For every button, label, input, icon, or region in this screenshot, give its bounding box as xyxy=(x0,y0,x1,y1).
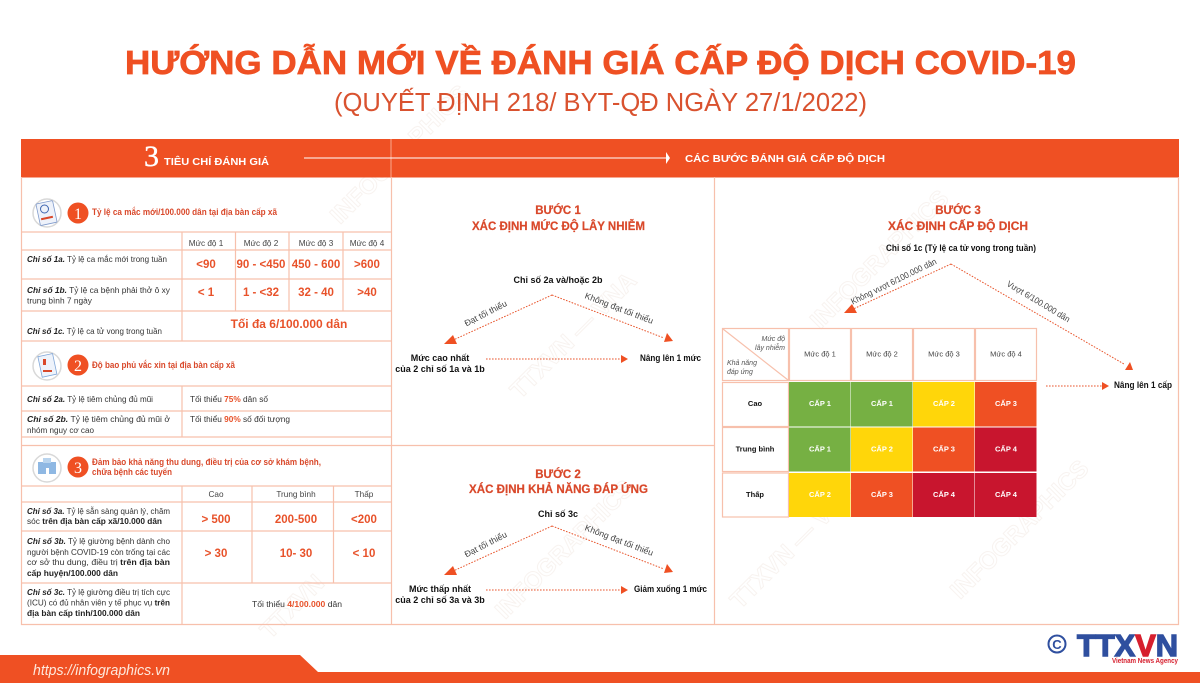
matrix header: Mức độ 4 xyxy=(990,350,1022,358)
heading 2: Độ bao phủ vắc xin tại địa bàn cấp xã xyxy=(92,359,236,370)
table headers xyxy=(189,239,385,248)
heading 3: chữa bệnh các tuyến xyxy=(92,467,172,477)
step 2 heading: BƯỚC 2 xyxy=(535,468,581,481)
step 3 heading: XÁC ĐỊNH CẤP ĐỘ DỊCH xyxy=(888,220,1028,233)
row 3a: 200-500 xyxy=(275,514,317,526)
panel: step 2 xyxy=(395,468,707,605)
table headers: Mức độ 4 xyxy=(350,239,385,248)
step 1 source: Chỉ số 2a và/hoặc 2b xyxy=(513,275,603,285)
panel: step 1 xyxy=(395,204,701,374)
step 2 left result: Mức thấp nhất xyxy=(409,584,471,594)
text: TTXVN — VNA xyxy=(505,267,642,404)
table headers xyxy=(208,490,374,499)
step 2 branches: Đạt tối thiểu xyxy=(463,529,509,559)
row 3a xyxy=(27,506,377,526)
table headers: Cao xyxy=(208,490,224,499)
title: HƯỚNG DẪN MỚI VỀ ĐÁNH GIÁ CẤP ĐỘ DỊCH COVID-19 xyxy=(125,43,1076,82)
row 3c: Tối thiểu 4/100.000 dân xyxy=(252,599,342,609)
matrix header: lây nhiễm xyxy=(755,343,785,352)
matrix arrow xyxy=(1046,382,1109,390)
matrix header: Khả năng xyxy=(727,359,757,367)
row 1b: < 1 xyxy=(198,287,215,299)
table headers: Trung bình xyxy=(276,490,316,499)
panel frames xyxy=(22,177,1178,624)
matrix row: cao: CẤP 1 xyxy=(871,398,893,408)
matrix row: cao: CẤP 1 xyxy=(809,398,831,408)
row 3c: Chỉ số 3c. Tỷ lệ giường điều trị tích cực xyxy=(27,587,171,597)
row 1b: Chỉ số 1b. Tỷ lệ ca bệnh phải thở ô xy xyxy=(27,285,171,295)
step 1 left result xyxy=(395,353,485,374)
matrix row: cao: Cao xyxy=(748,399,763,408)
step 2 left result xyxy=(395,584,485,605)
row 2b: nhóm nguy cơ cao xyxy=(27,425,94,435)
matrix header xyxy=(722,328,1036,380)
matrix row: trung binh: CẤP 2 xyxy=(871,444,893,454)
header band xyxy=(21,139,1179,178)
number 3: 3 xyxy=(74,460,82,477)
table headers: Mức độ 1 xyxy=(189,239,224,248)
step 1 right result: Nâng lên 1 mức xyxy=(640,353,701,363)
header band: 3 xyxy=(144,140,159,173)
step 1 branches: Không đạt tối thiểu xyxy=(583,291,655,326)
heading 1: Tỷ lệ ca mắc mới/100.000 dân tại địa bàn cấp xã xyxy=(92,206,278,217)
matrix header: Mức độ 3 xyxy=(928,350,960,358)
row 3b: Chỉ số 3b. Tỷ lệ giường bệnh dành cho xyxy=(27,536,170,546)
row 3c: (ICU) có đủ nhân viên y tế phục vụ trên xyxy=(27,598,170,608)
heading 3 xyxy=(92,457,321,477)
step 3 result: Nâng lên 1 cấp xyxy=(1114,380,1172,390)
step 3 heading: BƯỚC 3 xyxy=(935,204,981,217)
row 1b: 32 - 40 xyxy=(298,287,334,299)
step 2 source: Chỉ số 3c xyxy=(538,509,578,519)
row 2b xyxy=(27,414,290,435)
row 3b: cơ sở thu dung, điều trị trên địa bàn xyxy=(27,557,170,567)
row 1a: 450 - 600 xyxy=(292,259,340,271)
step 2 arrow xyxy=(486,586,628,594)
row 3a: sóc trên địa bàn cấp xã/10.000 dân xyxy=(27,516,162,526)
step 1 heading xyxy=(472,204,645,233)
text: INFOGRAPHICS xyxy=(325,80,474,229)
matrix row: thap: Thấp xyxy=(746,490,764,499)
step 1 heading: BƯỚC 1 xyxy=(535,204,581,217)
header band: TIÊU CHÍ ĐÁNH GIÁ xyxy=(164,155,269,168)
matrix header: Mức độ xyxy=(762,336,785,343)
logo: TTXVN: Vietnam News Agency xyxy=(1112,658,1178,665)
step 2 branches: Không đạt tối thiểu xyxy=(583,523,655,558)
row 3a: > 500 xyxy=(201,514,231,526)
matrix row: trung binh: Trung bình xyxy=(736,444,775,454)
step 1 arrow xyxy=(486,355,628,363)
row 3b: cấp huyện/100.000 dân xyxy=(27,568,118,578)
table headers: Thấp xyxy=(355,490,374,499)
panel: step 3 xyxy=(722,204,1172,517)
matrix row: trung binh: CẤP 3 xyxy=(933,444,955,454)
header band: CÁC BƯỚC ĐÁNH GIÁ CẤP ĐỘ DỊCH xyxy=(685,152,885,165)
row 2a xyxy=(27,394,268,404)
step 2 branches xyxy=(444,523,673,575)
step 1 heading: XÁC ĐỊNH MỨC ĐỘ LÂY NHIỄM xyxy=(472,220,645,233)
matrix header: Mức độ 2 xyxy=(866,350,898,358)
text: INFOGRAPHICS xyxy=(945,455,1094,604)
matrix header: đáp ứng xyxy=(727,369,753,376)
row 2b: Chỉ số 2b. Tỷ lệ tiêm chủng đủ mũi ở xyxy=(27,414,170,424)
footer url: https://infographics.vn xyxy=(33,663,170,679)
row 3c: địa bàn cấp tỉnh/100.000 dân xyxy=(27,608,140,618)
text: TTXVN xyxy=(255,570,330,644)
panel: criterion 1 xyxy=(22,199,392,341)
row 3a: <200 xyxy=(351,514,377,526)
row 1a: 90 - <450 xyxy=(237,259,285,271)
matrix row: cao: CẤP 2 xyxy=(933,398,955,408)
step 3 branches xyxy=(844,256,1133,370)
logo: TTXVN: TTXVN xyxy=(1077,628,1178,663)
number 1 xyxy=(68,202,88,224)
step 2 left result: của 2 chỉ số 3a và 3b xyxy=(395,595,485,605)
text: INFOGRAPHICS xyxy=(805,185,954,334)
row 2a: Chỉ số 2a. Tỷ lệ tiêm chủng đủ mũi xyxy=(27,394,153,404)
row 1a xyxy=(27,254,380,271)
footer band xyxy=(0,655,1200,683)
step 3 source: Chỉ số 1c (Tỷ lệ ca tử vong trong tuần) xyxy=(886,243,1036,253)
row 1b: 1 - <32 xyxy=(243,287,279,299)
table headers: Mức độ 3 xyxy=(299,239,334,248)
heading 3: Đảm bảo khả năng thu dung, điều trị của cơ sở khám bệnh, xyxy=(92,457,321,467)
row 1b: >40 xyxy=(357,287,377,299)
subtitle: (QUYẾT ĐỊNH 218/ BYT-QĐ NGÀY 27/1/2022) xyxy=(334,87,867,117)
matrix header: Mức độ 1 xyxy=(804,350,836,358)
matrix row: cao xyxy=(722,382,1036,426)
matrix row: thap: CẤP 3 xyxy=(871,489,893,499)
step 3 branches: Không vượt 6/100.000 dân xyxy=(849,256,938,306)
row 1a: >600 xyxy=(354,259,380,271)
row 3a: Chỉ số 3a. Tỷ lệ sẵn sàng quản lý, chăm xyxy=(27,506,170,516)
matrix row: thap: CẤP 4 xyxy=(933,489,956,499)
matrix row: trung binh: CẤP 4 xyxy=(995,444,1018,454)
step 1 branches xyxy=(444,291,673,344)
matrix row: thap: CẤP 2 xyxy=(809,489,831,499)
row 2a: Tối thiểu 75% dân số xyxy=(190,394,268,404)
row 1c xyxy=(27,317,347,336)
icon: hospital xyxy=(33,454,61,482)
icon: form xyxy=(33,352,61,380)
row 1c: Tối đa 6/100.000 dân xyxy=(231,317,347,331)
number 1: 1 xyxy=(74,206,82,223)
severity matrix xyxy=(722,328,1036,517)
step 3 heading xyxy=(888,204,1028,233)
panel: criterion 2 xyxy=(22,352,392,446)
step 1 left result: của 2 chỉ số 1a và 1b xyxy=(395,364,485,374)
row 3b: 10- 30 xyxy=(280,548,312,560)
matrix row: trung binh xyxy=(722,428,1036,472)
number 2: 2 xyxy=(74,358,82,375)
text: TTXVN — VNA xyxy=(725,477,862,614)
number 3 xyxy=(68,456,88,478)
row 3c xyxy=(27,587,342,618)
row 1b xyxy=(27,285,377,306)
text: INFOGRAPHICS xyxy=(490,475,639,624)
matrix row: trung binh: CẤP 1 xyxy=(809,444,831,454)
step 2 heading: XÁC ĐỊNH KHẢ NĂNG ĐÁP ỨNG xyxy=(469,483,648,496)
matrix row: thap xyxy=(722,473,1036,517)
row 1a: Chỉ số 1a. Tỷ lệ ca mắc mới trong tuần xyxy=(27,254,167,264)
row 1b: trung bình 7 ngày xyxy=(27,296,93,306)
row 3b: < 10 xyxy=(353,548,375,560)
row 2b: Tối thiểu 90% số đối tượng xyxy=(190,414,290,424)
matrix row: cao: CẤP 3 xyxy=(995,398,1017,408)
step 2 heading xyxy=(469,468,648,496)
step 3 branches: Vượt 6/100.000 dân xyxy=(1005,279,1072,324)
panel: criterion 3 xyxy=(22,454,392,624)
step 1 branches: Đạt tối thiểu xyxy=(463,298,509,328)
step 2 right result: Giảm xuống 1 mức xyxy=(634,584,707,594)
matrix row: thap: CẤP 4 xyxy=(995,489,1018,499)
table headers: Mức độ 2 xyxy=(244,239,279,248)
row 3b: > 30 xyxy=(205,548,227,560)
logo: TTXVN: C xyxy=(1052,637,1062,652)
row 3b xyxy=(27,536,375,578)
row 1a: <90 xyxy=(196,259,216,271)
icon: document xyxy=(33,199,61,227)
row 3b: người bệnh COVID-19 còn trống tại các xyxy=(27,547,171,557)
step 1 left result: Mức cao nhất xyxy=(411,353,469,363)
number 2 xyxy=(68,354,88,376)
row 1c: Chỉ số 1c. Tỷ lệ ca tử vong trong tuần xyxy=(27,326,162,336)
